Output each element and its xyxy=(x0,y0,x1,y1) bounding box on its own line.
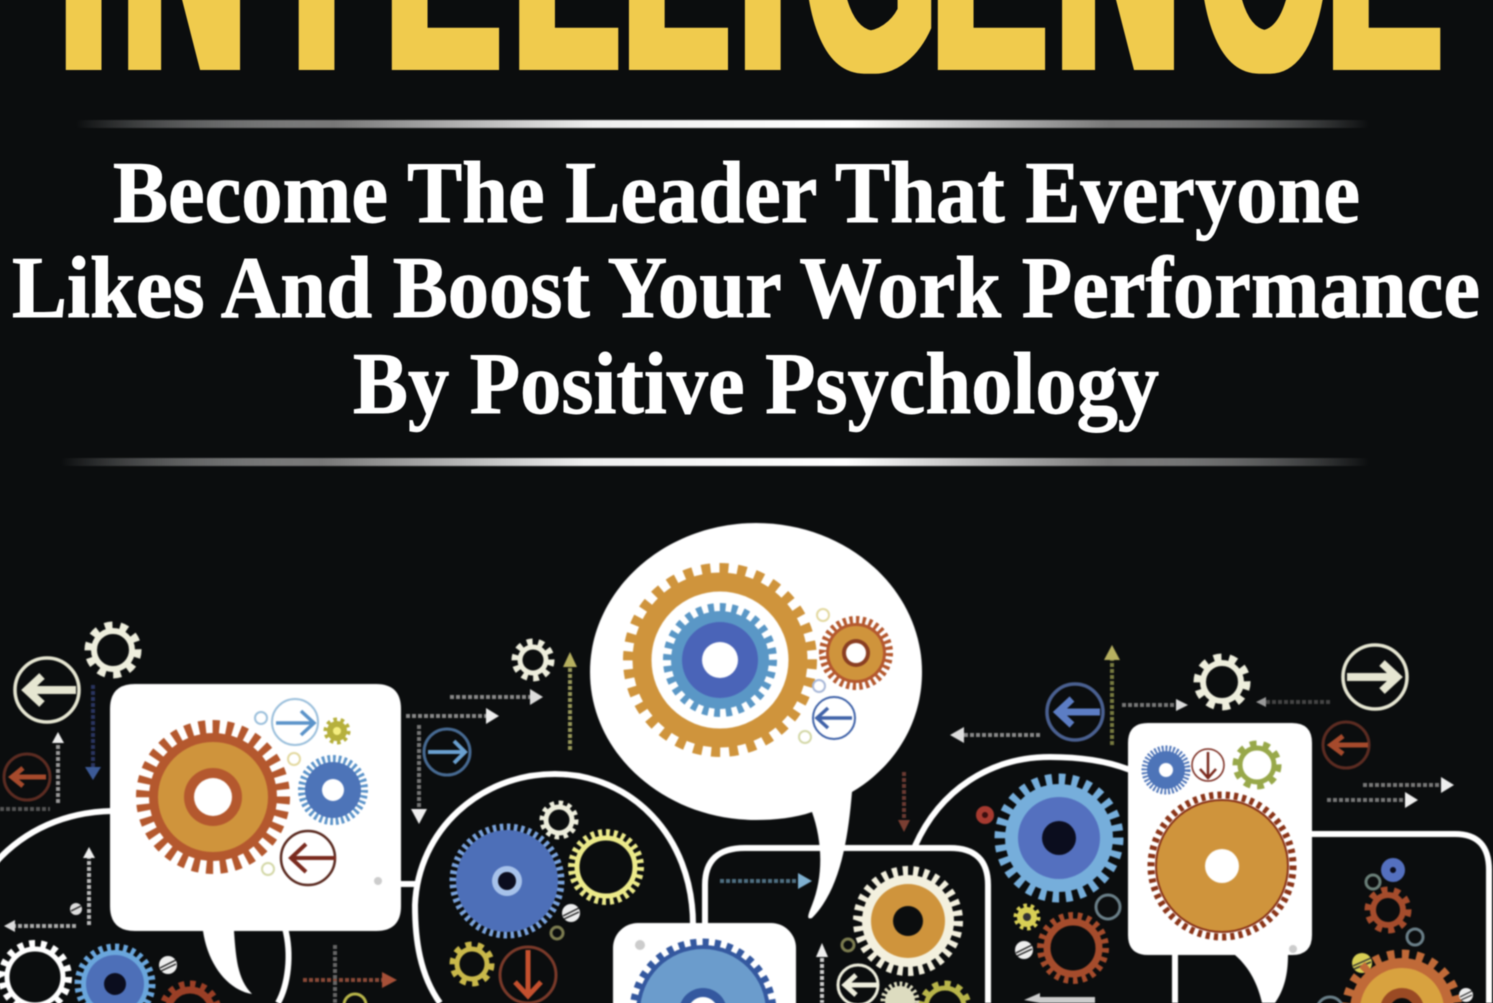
arrow: up white left xyxy=(52,732,64,803)
illustration: gears and speech bubbles xyxy=(0,523,1489,1003)
icon: blue right arrow circle xyxy=(424,729,470,775)
gear: brown ring xyxy=(1041,916,1105,980)
arrow: blue right xyxy=(720,873,812,889)
gear: inner blue xyxy=(668,608,772,712)
panel: top-right icons xyxy=(1047,645,1407,768)
subtitle: Become The Leader That Everyone xyxy=(113,145,1360,242)
arrow: vertical dim xyxy=(333,945,337,1003)
panel: right speech box xyxy=(1128,723,1312,1003)
arrow: right white second xyxy=(1327,792,1418,808)
arrow: up olive xyxy=(563,652,577,750)
gear: small white xyxy=(543,804,575,836)
gear: blue xyxy=(453,827,561,935)
gear: red bottom-left xyxy=(162,984,218,1003)
panel: centre round speech bubble xyxy=(590,523,922,918)
icon: cream right arrow circle xyxy=(1343,645,1407,709)
gear: light blue xyxy=(633,942,773,1003)
gear: light blue xyxy=(1000,779,1118,897)
icon: red left arrow circle xyxy=(4,754,50,800)
gear: white xyxy=(88,625,138,675)
arrow: line far left xyxy=(0,807,50,811)
screw xyxy=(562,904,580,922)
screw xyxy=(1015,941,1033,959)
gear: blue spiky xyxy=(1145,749,1187,791)
connector outlines xyxy=(0,757,1489,1003)
screw small xyxy=(70,903,82,915)
top divider xyxy=(75,120,1370,128)
arrow: bottom left bar xyxy=(1024,993,1095,1003)
icon: red down arrow circle xyxy=(500,947,556,1003)
panel: middle round gears xyxy=(453,804,640,1003)
icon: left arrow circle xyxy=(281,831,336,885)
gear: white and orange xyxy=(858,871,958,971)
gear: big orange ring xyxy=(630,570,810,750)
gear: blue bottom-left xyxy=(78,947,152,1003)
icon: blue left arrow circle xyxy=(1047,684,1103,740)
screw xyxy=(1459,988,1473,1002)
gear: white small xyxy=(515,642,551,678)
arrow: right white small xyxy=(1122,699,1188,711)
gear: large brown xyxy=(143,727,283,867)
gear: small yellow xyxy=(326,720,348,742)
arrow: up white centre xyxy=(816,943,828,1003)
screw xyxy=(159,956,177,974)
arrow: left white right xyxy=(950,727,1040,743)
gear: white xyxy=(1197,657,1247,707)
arrow: red right xyxy=(303,972,397,988)
gear: large orange xyxy=(1151,795,1293,937)
gear: olive small xyxy=(344,994,366,1003)
gear: white bottom-left xyxy=(2,944,68,1003)
small rings xyxy=(255,712,300,875)
gear: olive xyxy=(1236,744,1278,786)
arrow: red down xyxy=(898,772,910,832)
arrow: up white xyxy=(83,847,95,925)
panel: centre rect gears xyxy=(838,871,968,1003)
screw yellow xyxy=(1352,953,1372,973)
icon: cream left arrow circle xyxy=(838,965,878,1003)
arrow: down navy xyxy=(85,685,101,780)
subtitle: By Positive Psychology xyxy=(353,336,1159,433)
gear: olive xyxy=(922,984,968,1003)
panel: left speech box xyxy=(110,684,401,994)
arrows xyxy=(0,645,1454,1003)
gear: small red xyxy=(976,806,994,824)
subtitle xyxy=(12,145,1480,433)
arrow: right white upper xyxy=(450,689,543,705)
panel: top-left icons xyxy=(2,625,551,1003)
gear: small brown orange xyxy=(823,620,889,686)
panel: right top round gears xyxy=(976,779,1120,980)
panel: bottom centre box xyxy=(613,923,796,1003)
icon: down arrow circle xyxy=(1192,749,1224,781)
small rings xyxy=(799,609,829,743)
icon: cream left arrow circle xyxy=(15,658,79,722)
gear: cream small xyxy=(883,984,917,1003)
icon: blue left arrow circle xyxy=(813,697,855,739)
arrow: up olive right xyxy=(1104,645,1120,745)
arrow: left thin xyxy=(1256,697,1330,707)
icon: red left arrow circle xyxy=(1323,722,1369,768)
arrow: left white xyxy=(4,920,76,932)
gear: large orange brown xyxy=(1346,954,1458,1003)
icon: right arrow circle xyxy=(272,699,318,745)
gear: small yellow xyxy=(1016,906,1038,928)
bottom divider xyxy=(60,458,1370,466)
panel: right bottom gears xyxy=(1317,858,1473,1003)
arrow: right white xyxy=(406,708,499,724)
gear: brown xyxy=(1368,890,1408,930)
gear: blue xyxy=(302,759,364,821)
gear: small blue xyxy=(1381,858,1405,882)
gear: olive xyxy=(453,945,491,983)
arrow: right white far xyxy=(1363,777,1454,793)
arrow: down white xyxy=(411,725,427,824)
gear: yellow ring xyxy=(572,833,640,901)
